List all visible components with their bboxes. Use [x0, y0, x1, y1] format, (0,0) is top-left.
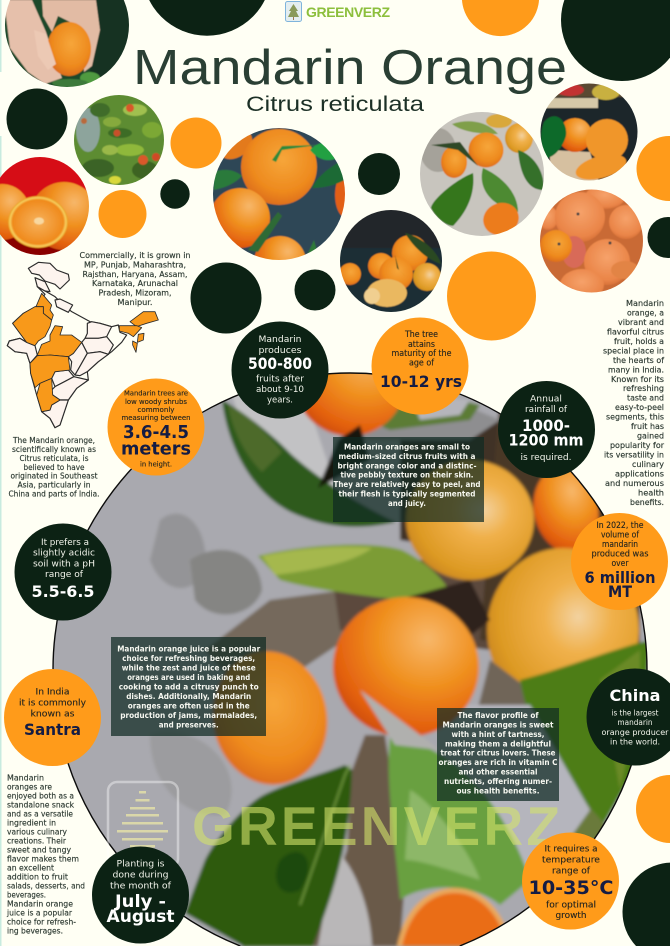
text: introduction paragraph: orange, a	[627, 308, 664, 318]
text: how mandarins are enjoyed: standalone snack	[7, 800, 75, 810]
text: introduction paragraph: taste and	[627, 394, 664, 403]
text panel: culinary uses: cooking to add a citrusy punch to	[119, 683, 259, 692]
text panel: flavor profile: Mandarin oranges is sweet	[442, 720, 554, 729]
logo: Greenverz header: GREENVERZ	[306, 4, 390, 20]
text: introduction paragraph: fruit has	[631, 422, 664, 431]
text panel: description of mandarin fruit: their flesh is typically segmented	[338, 489, 476, 498]
stat: annual rainfall: Annual	[530, 394, 562, 404]
text: introduction paragraph: health	[638, 488, 664, 497]
stat: tree height: measuring between	[122, 414, 190, 422]
stat: fruits produced: years.	[267, 394, 293, 404]
stat: soil pH: It prefers a	[41, 537, 89, 547]
stat: local name Santra	[4, 669, 101, 766]
text: introduction paragraph: culinary	[632, 460, 665, 469]
text: how mandarins are enjoyed: addition to fruit	[7, 872, 68, 882]
text panel: flavor profile: and other essential	[458, 768, 538, 777]
stat: temperature range: 10-35°C	[528, 877, 614, 899]
stat: soil pH: 5.5-6.5	[32, 582, 94, 601]
stat: age of maturity	[372, 318, 468, 414]
panel: painted mandarin hero image	[50, 324, 650, 946]
stat: China largest producer: China	[610, 686, 660, 705]
text: how mandarins are enjoyed: juice is a popular	[6, 908, 73, 918]
text panel: description of mandarin fruit: They are relatively easy to peel, and	[334, 480, 480, 489]
text panel: flavor profile: treat for citrus lovers. These	[440, 749, 556, 758]
text: how mandarins are enjoyed: various culinary	[7, 828, 67, 836]
stat: soil pH	[14, 524, 112, 620]
stat: annual rainfall: 1200 mm	[508, 430, 584, 450]
text: introduction paragraph: and numerous	[605, 479, 664, 488]
text panel: description of mandarin fruit: tive pebbly texture on their skin.	[340, 471, 474, 480]
stat: soil pH: soil with a pH	[33, 558, 95, 568]
text: origin paragraph: believed to have	[24, 463, 85, 472]
text: origin paragraph: scientifically known as	[12, 445, 96, 454]
photo: mandarins with leaves on grey	[420, 112, 544, 236]
stat: soil pH: range of	[45, 569, 84, 579]
watermark: Greenverz logo over hero: GREENVERZ	[192, 795, 560, 857]
text: introduction paragraph: applications	[615, 469, 664, 478]
stat: tree height: 3.6-4.5	[123, 422, 189, 443]
text: introduction paragraph: refreshing	[623, 384, 664, 393]
text: how mandarins are enjoyed: ingredient in	[7, 818, 56, 828]
text panel: culinary uses: oranges are often used in the	[128, 701, 250, 710]
stat: tree height: commonly	[138, 406, 174, 414]
stat: China largest producer: orange producer	[602, 728, 669, 737]
text panel: culinary uses: oranges are used in baking and	[127, 673, 250, 682]
stat: temperature range: It requires a	[544, 844, 598, 854]
stat: China largest producer: is the largest	[612, 708, 659, 718]
map of India with growing states	[7, 262, 158, 428]
text panel: flavor profile: The flavor profile of	[458, 711, 539, 720]
stat: tree height: Mandarin trees are	[124, 390, 188, 398]
text: origin paragraph: Citrus reticulata, is	[20, 454, 89, 463]
stat: 2022 production volume: MT	[608, 582, 632, 601]
stat: local name Santra: In India	[36, 686, 70, 696]
stat: temperature range: temperature	[542, 854, 600, 864]
text panel: culinary uses	[111, 637, 266, 736]
stat: planting season: the month of	[110, 880, 172, 890]
stat: fruits produced	[232, 322, 328, 418]
text: commercial growing regions: Pradesh, Mizoram,	[98, 289, 172, 298]
stat: temperature range	[522, 832, 619, 930]
stat: planting season	[92, 846, 189, 944]
stat: age of maturity: 10-12 yrs	[380, 372, 462, 391]
text panel: description of mandarin fruit: Mandarin oranges are small to	[344, 442, 470, 452]
text: commercial growing regions	[80, 251, 191, 307]
stat: tree height: low woody shrubs	[125, 398, 187, 406]
text: how mandarins are enjoyed: beverages.	[7, 890, 46, 900]
text: introduction paragraph	[603, 299, 665, 507]
stat: tree height: in height.	[140, 460, 172, 468]
stat: annual rainfall	[498, 381, 595, 478]
photo: pile of mandarins	[540, 190, 643, 292]
text panel: description of mandarin fruit: and juicy.	[388, 499, 426, 508]
text panel: flavor profile: with a hint of tartness,	[452, 730, 545, 739]
text: commercial growing regions: Commercially, it is grown in	[80, 251, 191, 260]
photo: hands washing an orange	[5, 0, 129, 87]
stat: local name Santra: it is commonly	[19, 698, 86, 708]
text: introduction paragraph: popularity for	[610, 441, 665, 450]
text panel: culinary uses: dishes. Additionally, Mandarin	[126, 692, 251, 701]
text: origin paragraph: Asia, particularly in	[18, 480, 91, 490]
stat: 2022 production volume: In 2022, the	[596, 520, 644, 530]
text: how mandarins are enjoyed: Mandarin	[7, 774, 44, 782]
stat: soil pH: slightly acidic	[33, 548, 95, 558]
stat: age of maturity: attains	[408, 339, 435, 349]
text: commercial growing regions: Manipur.	[118, 298, 152, 307]
stat: temperature range: for optimal	[546, 900, 596, 910]
subtitle: Citrus reticulata	[246, 93, 424, 116]
text: origin paragraph: China and parts of India.	[8, 490, 100, 498]
text panel: culinary uses: production of jams, marmalades,	[120, 711, 257, 720]
text panel: description of mandarin fruit: bright orange color and a distinc-	[338, 461, 476, 470]
text: origin paragraph: The Mandarin orange,	[12, 436, 95, 445]
stat: 2022 production volume: volume of	[601, 530, 640, 540]
text: how mandarins are enjoyed	[6, 774, 85, 936]
text: introduction paragraph: Known for its	[611, 375, 664, 384]
stat: local name Santra: known as	[30, 708, 74, 718]
stat: China largest producer	[586, 668, 670, 766]
text: introduction paragraph: segments, this	[606, 413, 664, 422]
text: origin paragraph: originated in Southeast	[10, 472, 98, 481]
stat: planting season: Planting is	[116, 858, 164, 868]
photo: halved mandarins on board	[540, 84, 638, 180]
text panel: description of mandarin fruit	[333, 437, 484, 522]
text panel: description of mandarin fruit: medium-sized citrus fruits with a	[338, 452, 476, 461]
text panel: flavor profile: making them a delightful	[445, 739, 551, 748]
stat: temperature range: growth	[556, 910, 586, 920]
text: how mandarins are enjoyed: an excellent	[7, 864, 54, 872]
watermark: Greenverz logo over hero	[108, 782, 560, 868]
text: how mandarins are enjoyed: oranges are	[7, 782, 52, 792]
text: commercial growing regions: MP, Punjab, Maharashtra,	[84, 260, 186, 269]
text panel: flavor profile: ous health benefits.	[456, 787, 540, 796]
text: how mandarins are enjoyed: and as a versatile	[7, 810, 73, 818]
stat: fruits produced: about 9-10	[256, 384, 304, 394]
text: how mandarins are enjoyed: enjoyed both as a	[7, 792, 74, 800]
photo: mandarins on dark slate	[340, 210, 442, 312]
text: how mandarins are enjoyed: flavor makes them	[7, 854, 79, 864]
stat: age of maturity: age of	[409, 358, 435, 368]
text: introduction paragraph: fruit, holds a	[614, 337, 664, 346]
stat: annual rainfall: 1000-	[522, 416, 570, 435]
text: how mandarins are enjoyed: salads, desserts, and	[7, 882, 85, 890]
text: how mandarins are enjoyed: Mandarin orange	[7, 900, 73, 908]
stat: annual rainfall: rainfall of	[525, 404, 568, 414]
text: introduction paragraph: flavorful citrus	[607, 327, 664, 336]
text panel: flavor profile: oranges are rich in vitamin C	[438, 758, 558, 767]
stat: fruits produced: produces	[258, 345, 302, 355]
text: introduction paragraph: special place in	[603, 346, 664, 355]
text: how mandarins are enjoyed: creations. Their	[7, 836, 67, 846]
text: how mandarins are enjoyed: choice for refresh-	[7, 918, 76, 926]
text panel: flavor profile: nutrients, offering numer-	[444, 777, 552, 786]
stat: age of maturity: The tree	[404, 329, 438, 339]
text: origin paragraph	[8, 436, 100, 498]
photo: mandarin tree	[74, 95, 164, 185]
text: introduction paragraph: easy-to-peel	[615, 403, 664, 412]
stat: China largest producer: in the world.	[610, 738, 660, 746]
stat: tree height	[108, 378, 204, 476]
text: how mandarins are enjoyed: sweet and tangy	[7, 846, 71, 854]
text panel: culinary uses: Mandarin orange juice is a popular	[117, 645, 260, 654]
stat: annual rainfall: is required.	[520, 452, 572, 462]
text: introduction paragraph: benefits.	[630, 498, 664, 507]
stat: 2022 production volume: produced was	[592, 548, 648, 558]
text: introduction paragraph: vibrant and	[618, 318, 664, 327]
stat: age of maturity: maturity of the	[392, 348, 452, 358]
title: Mandarin Orange	[133, 41, 567, 95]
text: introduction paragraph: the hearts of	[613, 356, 664, 365]
text panel: culinary uses: and preserves.	[159, 720, 219, 729]
stat: China largest producer: mandarin	[618, 718, 653, 727]
stat: planting season: July -	[114, 892, 166, 912]
text panel: flavor profile	[437, 708, 559, 801]
text: commercial growing regions: Karnataka, Arunachal	[92, 279, 178, 288]
text: introduction paragraph: its versatility in	[604, 450, 664, 460]
stat: temperature range: range of	[552, 866, 591, 876]
stat: planting season: done during	[112, 870, 168, 880]
text panel: culinary uses: choice for refreshing beverages,	[122, 654, 255, 663]
photo: halved orange on red	[0, 157, 89, 255]
stat: tree height: meters	[121, 438, 191, 460]
stat: 2022 production volume	[571, 513, 668, 610]
text panel: culinary uses: while the zest and juice of these	[122, 664, 256, 673]
text: introduction paragraph: Mandarin	[626, 299, 664, 308]
text: introduction paragraph: gained	[637, 432, 664, 441]
stat: fruits produced: fruits after	[256, 374, 305, 384]
stat: local name Santra: Santra	[24, 720, 81, 739]
text: introduction paragraph: many in India.	[608, 365, 664, 374]
stat: planting season: August	[106, 907, 174, 927]
logo: Greenverz header	[286, 2, 390, 22]
stat: fruits produced: 500-800	[248, 354, 312, 373]
stat: fruits produced: Mandarin	[258, 334, 302, 344]
text: how mandarins are enjoyed: ing beverages.	[7, 926, 63, 936]
photo: oranges on slate	[213, 128, 345, 260]
stat: 2022 production volume: over	[612, 558, 629, 568]
stat: 2022 production volume: 6 million	[584, 568, 656, 587]
stat: 2022 production volume: mandarin	[602, 539, 638, 549]
text: commercial growing regions: Rajsthan, Haryana, Assam,	[82, 270, 188, 279]
